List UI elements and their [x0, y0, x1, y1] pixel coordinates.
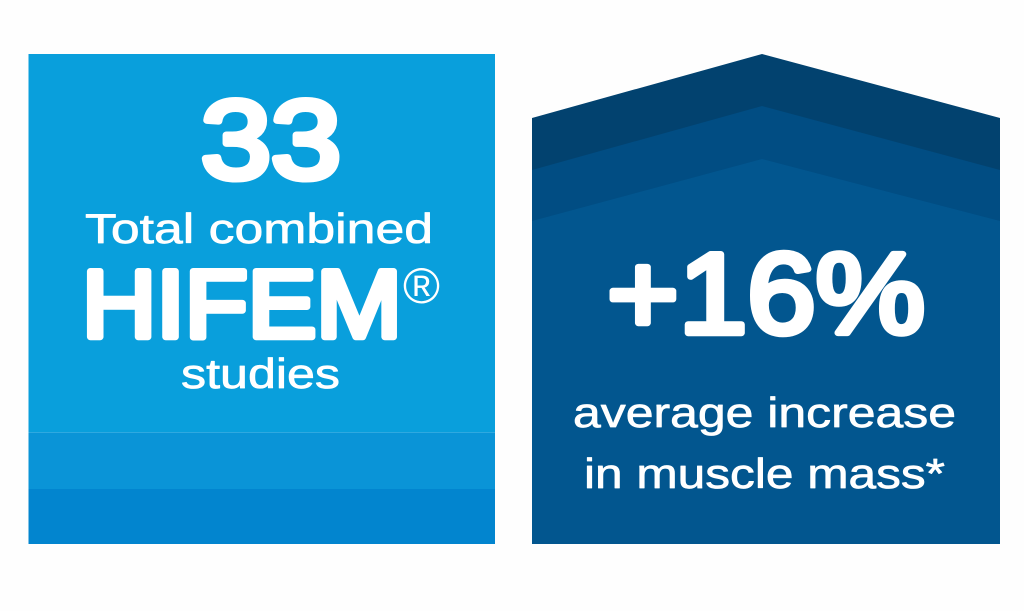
- label: in muscle mass: in muscle mass*: [584, 450, 945, 497]
- label: studies: studies: [181, 350, 340, 397]
- stat: +16%: +16%: [607, 231, 925, 358]
- label: Total combined: Total combined: [85, 205, 433, 252]
- panel: muscle mass increase: [532, 54, 1000, 544]
- stat: 33: 33: [201, 79, 341, 202]
- panel background top: [28, 54, 495, 433]
- panel body: [532, 159, 1000, 544]
- label: average increase: average increase: [573, 389, 956, 436]
- chevron top layer: [532, 54, 1000, 544]
- chevron middle layer: [532, 106, 1000, 544]
- panel: HIFEM studies: [28, 54, 495, 544]
- panel middle band: [28, 432, 495, 490]
- label: HIFEM: HIFEM: [82, 251, 402, 358]
- registered mark: ®: [403, 258, 440, 314]
- panel bottom band: [28, 489, 495, 544]
